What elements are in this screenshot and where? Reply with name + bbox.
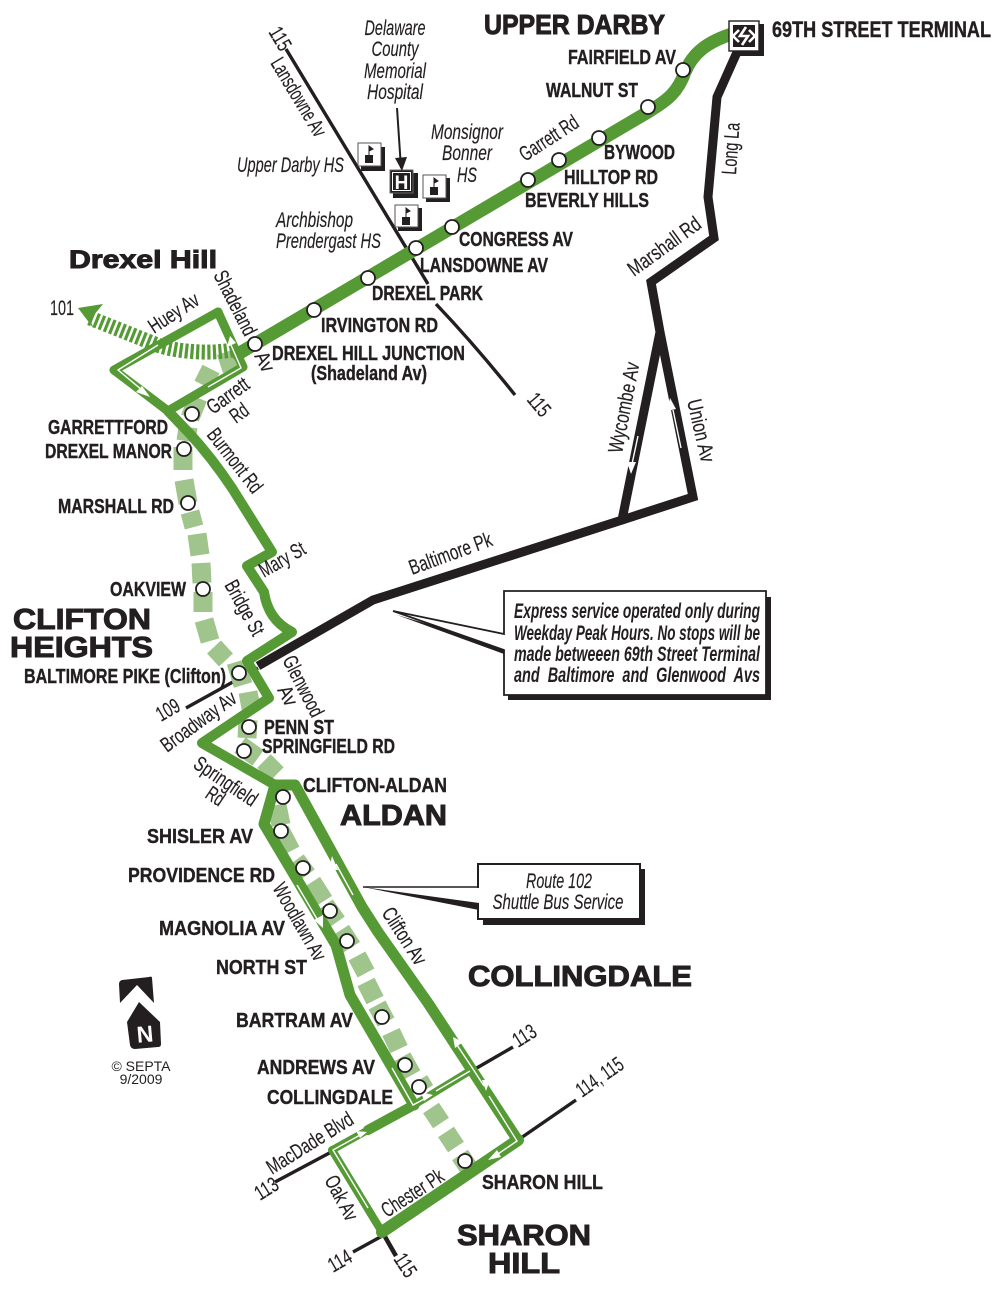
street labels: 113 — [250, 1173, 283, 1205]
street labels: Bridge St — [220, 576, 269, 640]
landmark labels: County — [372, 38, 420, 61]
street labels: 113 — [508, 1020, 541, 1052]
area headings: UPPER DARBY — [484, 9, 665, 40]
street labels: 115 — [522, 388, 555, 422]
landmark labels: Delaware — [364, 17, 426, 40]
street labels: Clifton Av — [377, 903, 431, 970]
street labels: 114 — [324, 1245, 356, 1277]
street labels: Lansdowne Av — [266, 54, 331, 141]
station labels: LANSDOWNE AV — [420, 255, 549, 277]
station labels: DREXEL MANOR — [45, 441, 172, 463]
station labels: SHISLER AV — [147, 826, 254, 848]
landmark labels: Bonner — [442, 142, 493, 165]
area headings: COLLINGDALE — [468, 961, 692, 993]
terminal icon — [729, 21, 764, 56]
street labels: Oak Av — [320, 1172, 363, 1225]
direction arrows — [118, 336, 517, 1208]
shuttle route: light green dashes — [183, 352, 468, 1167]
station labels: HILLTOP RD — [564, 167, 658, 189]
landmark labels: Prendergast HS — [276, 230, 381, 253]
callout: express service: and Baltimore and Glenwood Avs — [514, 664, 760, 687]
street labels: Av — [273, 682, 302, 710]
callout: express service: made betweeen 69th Street Terminal — [514, 643, 761, 666]
street labels: Shadeland — [209, 267, 261, 340]
north arrow: N — [135, 1020, 154, 1048]
station labels: DREXEL HILL JUNCTION — [272, 343, 465, 365]
landmark labels: Hospital — [367, 81, 424, 104]
station labels: (Shadeland Av) — [311, 363, 427, 385]
station labels: SHARON HILL — [482, 1172, 603, 1194]
landmark labels: Memorial — [364, 60, 427, 83]
station labels: NORTH ST — [216, 957, 307, 979]
station labels: BALTIMORE PIKE (Clifton) — [24, 666, 226, 688]
credit — [111, 1058, 171, 1087]
school icons — [358, 143, 450, 231]
callout: express service: Weekday Peak Hours. No stops will be — [514, 622, 760, 645]
station labels: CLIFTON-ALDAN — [303, 775, 447, 797]
area headings: SHARON — [457, 1220, 591, 1252]
callout: route 102 shuttle: Shuttle Bus Service — [492, 891, 624, 914]
street labels: MacDade Blvd — [262, 1108, 358, 1179]
area headings: Drexel Hill — [69, 246, 217, 274]
area headings: HILL — [488, 1248, 560, 1280]
callout: route 102 shuttle: Route 102 — [526, 870, 592, 893]
callout: express service: Express service operated only during — [514, 600, 760, 623]
station labels: OAKVIEW — [110, 579, 186, 601]
street labels: Woodlawn Av — [268, 879, 331, 965]
area headings: ALDAN — [340, 800, 447, 832]
credit: © SEPTA — [111, 1058, 171, 1074]
landmark labels: Monsignor — [431, 121, 504, 144]
hospital icon: H — [395, 173, 408, 194]
station markers — [177, 63, 690, 1168]
callout: express service — [393, 591, 771, 700]
street labels: Rd — [225, 399, 254, 428]
landmark labels: HS — [457, 164, 477, 187]
station labels: PROVIDENCE RD — [128, 865, 275, 887]
street labels: Wycombe Av — [604, 360, 645, 455]
street labels: Glenwood — [278, 652, 328, 721]
street labels: 114, 115 — [572, 1053, 628, 1102]
street labels: Chester Pk — [377, 1165, 449, 1222]
street labels: Rd — [201, 782, 229, 811]
street labels: Long La — [718, 122, 745, 175]
street labels — [50, 23, 745, 1282]
station labels: BYWOOD — [604, 142, 675, 164]
station labels: DREXEL PARK — [372, 283, 483, 305]
street labels: Burmont Rd — [202, 424, 267, 498]
street labels: 101 — [50, 297, 74, 320]
street labels: 115 — [264, 23, 296, 55]
hatched connection to route 101 — [78, 304, 232, 352]
station labels: CONGRESS AV — [459, 229, 574, 251]
station labels: IRVINGTON RD — [321, 315, 438, 337]
area headings: CLIFTON — [13, 604, 151, 636]
route 102 green line — [114, 33, 735, 1232]
credit: 9/2009 — [120, 1071, 163, 1087]
hospital icon — [390, 108, 418, 198]
station labels: MARSHALL RD — [58, 496, 174, 518]
street labels: Mary St — [255, 537, 310, 582]
street labels: Union Av — [682, 397, 719, 465]
station labels: COLLINGDALE — [267, 1087, 393, 1109]
landmark labels — [237, 17, 504, 253]
thin connecting routes — [186, 49, 576, 1256]
street labels: Marshall Rd — [623, 212, 706, 281]
street labels: Av — [250, 348, 279, 376]
street labels: Garrett Rd — [515, 111, 583, 166]
street labels: 109 — [152, 694, 184, 726]
street labels: 115 — [389, 1249, 421, 1282]
station labels: MAGNOLIA AV — [159, 918, 286, 940]
station labels: ANDREWS AV — [257, 1057, 376, 1079]
street labels: Garrett — [202, 373, 254, 419]
callout: route 102 shuttle — [363, 864, 645, 925]
area headings: HEIGHTS — [10, 632, 153, 664]
north arrow — [119, 977, 161, 1049]
station labels: FAIRFIELD AV — [568, 47, 677, 69]
landmark labels: Upper Darby HS — [237, 154, 344, 177]
area headings — [10, 9, 692, 1280]
express route: black line — [258, 50, 738, 666]
station labels: GARRETTFORD — [48, 417, 168, 439]
street labels: Broadway Av — [156, 687, 241, 757]
street labels: Huey Av — [144, 288, 204, 338]
station labels: SPRINGFIELD RD — [262, 736, 395, 758]
station labels: BARTRAM AV — [236, 1010, 354, 1032]
street labels: Springfield — [189, 752, 262, 811]
station labels: WALNUT ST — [546, 80, 638, 102]
station labels: BEVERLY HILLS — [525, 190, 649, 212]
street labels: Baltimore Pk — [406, 528, 496, 580]
station labels: PENN ST — [264, 717, 334, 739]
landmark labels: Archbishop — [275, 209, 353, 232]
